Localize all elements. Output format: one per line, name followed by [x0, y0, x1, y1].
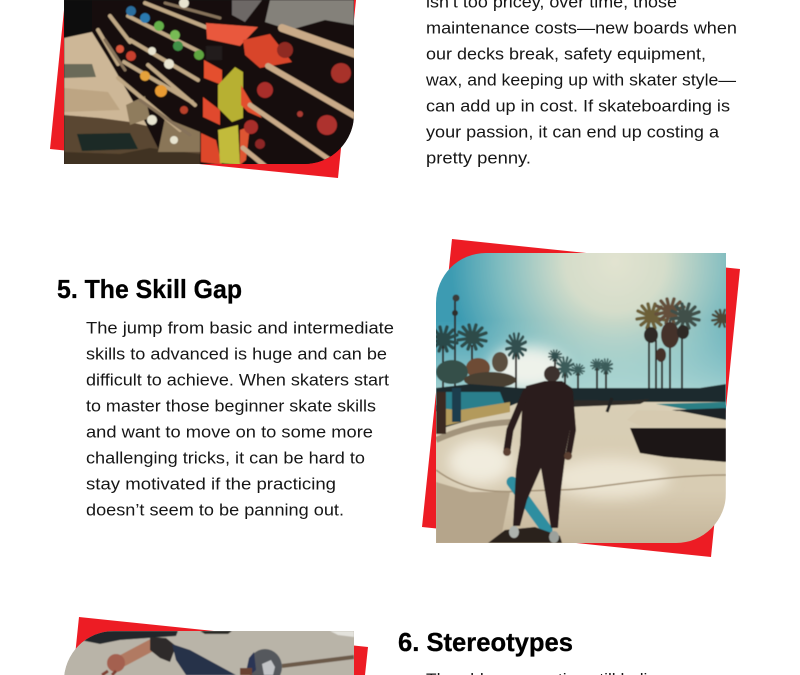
body text: skill gap — [86, 318, 394, 520]
body text: cost: our decks break, safety equipment, — [426, 44, 706, 64]
photo: older skater carving low — [60, 631, 360, 675]
cap — [248, 649, 282, 675]
large foreground decks — [243, 28, 358, 166]
red backing square: skatepark photo — [422, 239, 740, 557]
skateboard — [512, 482, 547, 530]
body text: skill gap: and want to move on to some more — [86, 422, 373, 442]
red backing square: skate shop photo — [50, 0, 356, 178]
red backing square: skater photo — [73, 617, 368, 675]
body text: skill gap: to master those beginner skate skills — [86, 396, 376, 416]
photo: skater at a beachside skatepark — [429, 250, 732, 550]
body text: skill gap: difficult to achieve. When skaters start — [86, 370, 389, 390]
concrete block and dark wall — [672, 408, 726, 421]
display boxes — [206, 23, 258, 46]
photo: skate shop wall of boards — [64, 0, 358, 170]
boards — [98, 3, 220, 135]
body text: skill gap: challenging tricks, it can be hard to — [86, 448, 365, 468]
body text: skill gap: doesn’t seem to be panning out. — [86, 500, 344, 520]
left trees — [466, 358, 490, 378]
top-right merchandise — [232, 0, 262, 22]
body text: skill gap: stay motivated if the practicing — [86, 474, 336, 494]
body text: cost: wax, and keeping up with skater style— — [425, 70, 736, 90]
section 4: cost of skateboarding — [50, 0, 737, 178]
body text: cost — [425, 0, 737, 168]
body text: skill gap: skills to advanced is huge and can be — [86, 344, 387, 364]
body text: cost: can add up in cost. If skateboarding is — [426, 96, 730, 116]
palms — [441, 300, 684, 389]
body text: cost: maintenance costs—new boards when — [426, 18, 737, 38]
ground — [430, 402, 726, 550]
body text: cost: pretty penny. — [426, 148, 531, 168]
skater — [503, 366, 574, 543]
heading: 5. The Skill Gap: 5. The Skill Gap — [57, 274, 242, 304]
section 6: stereotypes — [60, 617, 684, 675]
body text: cost: your passion, it can end up costing a — [426, 122, 720, 142]
body text: skill gap: The jump from basic and intermediate — [86, 318, 394, 338]
heading: 6. Stereotypes: 6. Stereotypes — [398, 627, 573, 657]
arm — [120, 645, 152, 662]
shadow — [488, 527, 562, 543]
section 5: the skill gap — [57, 239, 740, 557]
crowd and fence — [436, 384, 726, 430]
